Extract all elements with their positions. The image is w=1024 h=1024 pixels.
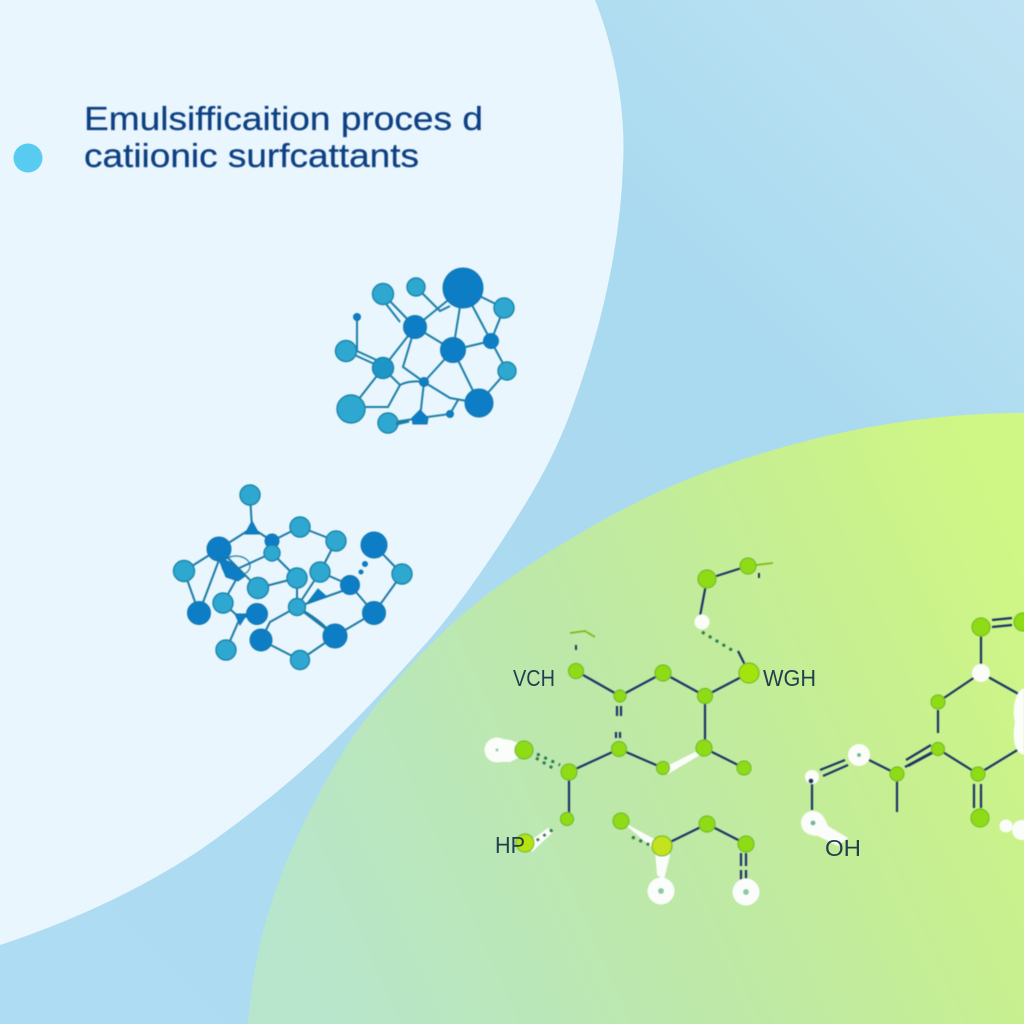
icon: title bullet dot xyxy=(14,144,42,172)
molecule: green centre structure xyxy=(484,558,773,906)
label: VCH: VCH xyxy=(513,665,555,691)
panel: pale blue curved area xyxy=(0,0,623,945)
white bond highlights xyxy=(497,738,700,880)
label: VGH: WGH xyxy=(763,665,816,691)
title: catiionic surfcattants xyxy=(84,137,419,174)
panel: green curved area xyxy=(248,413,1024,1024)
title: Emulsifficaition proces d xyxy=(84,100,483,137)
molecule network: upper blue xyxy=(336,268,516,433)
title xyxy=(84,100,483,174)
molecule network: lower blue xyxy=(174,485,412,670)
label: OH: OH xyxy=(825,835,861,861)
label: HP: HP xyxy=(495,832,525,858)
molecule: green right structure xyxy=(801,613,1024,846)
